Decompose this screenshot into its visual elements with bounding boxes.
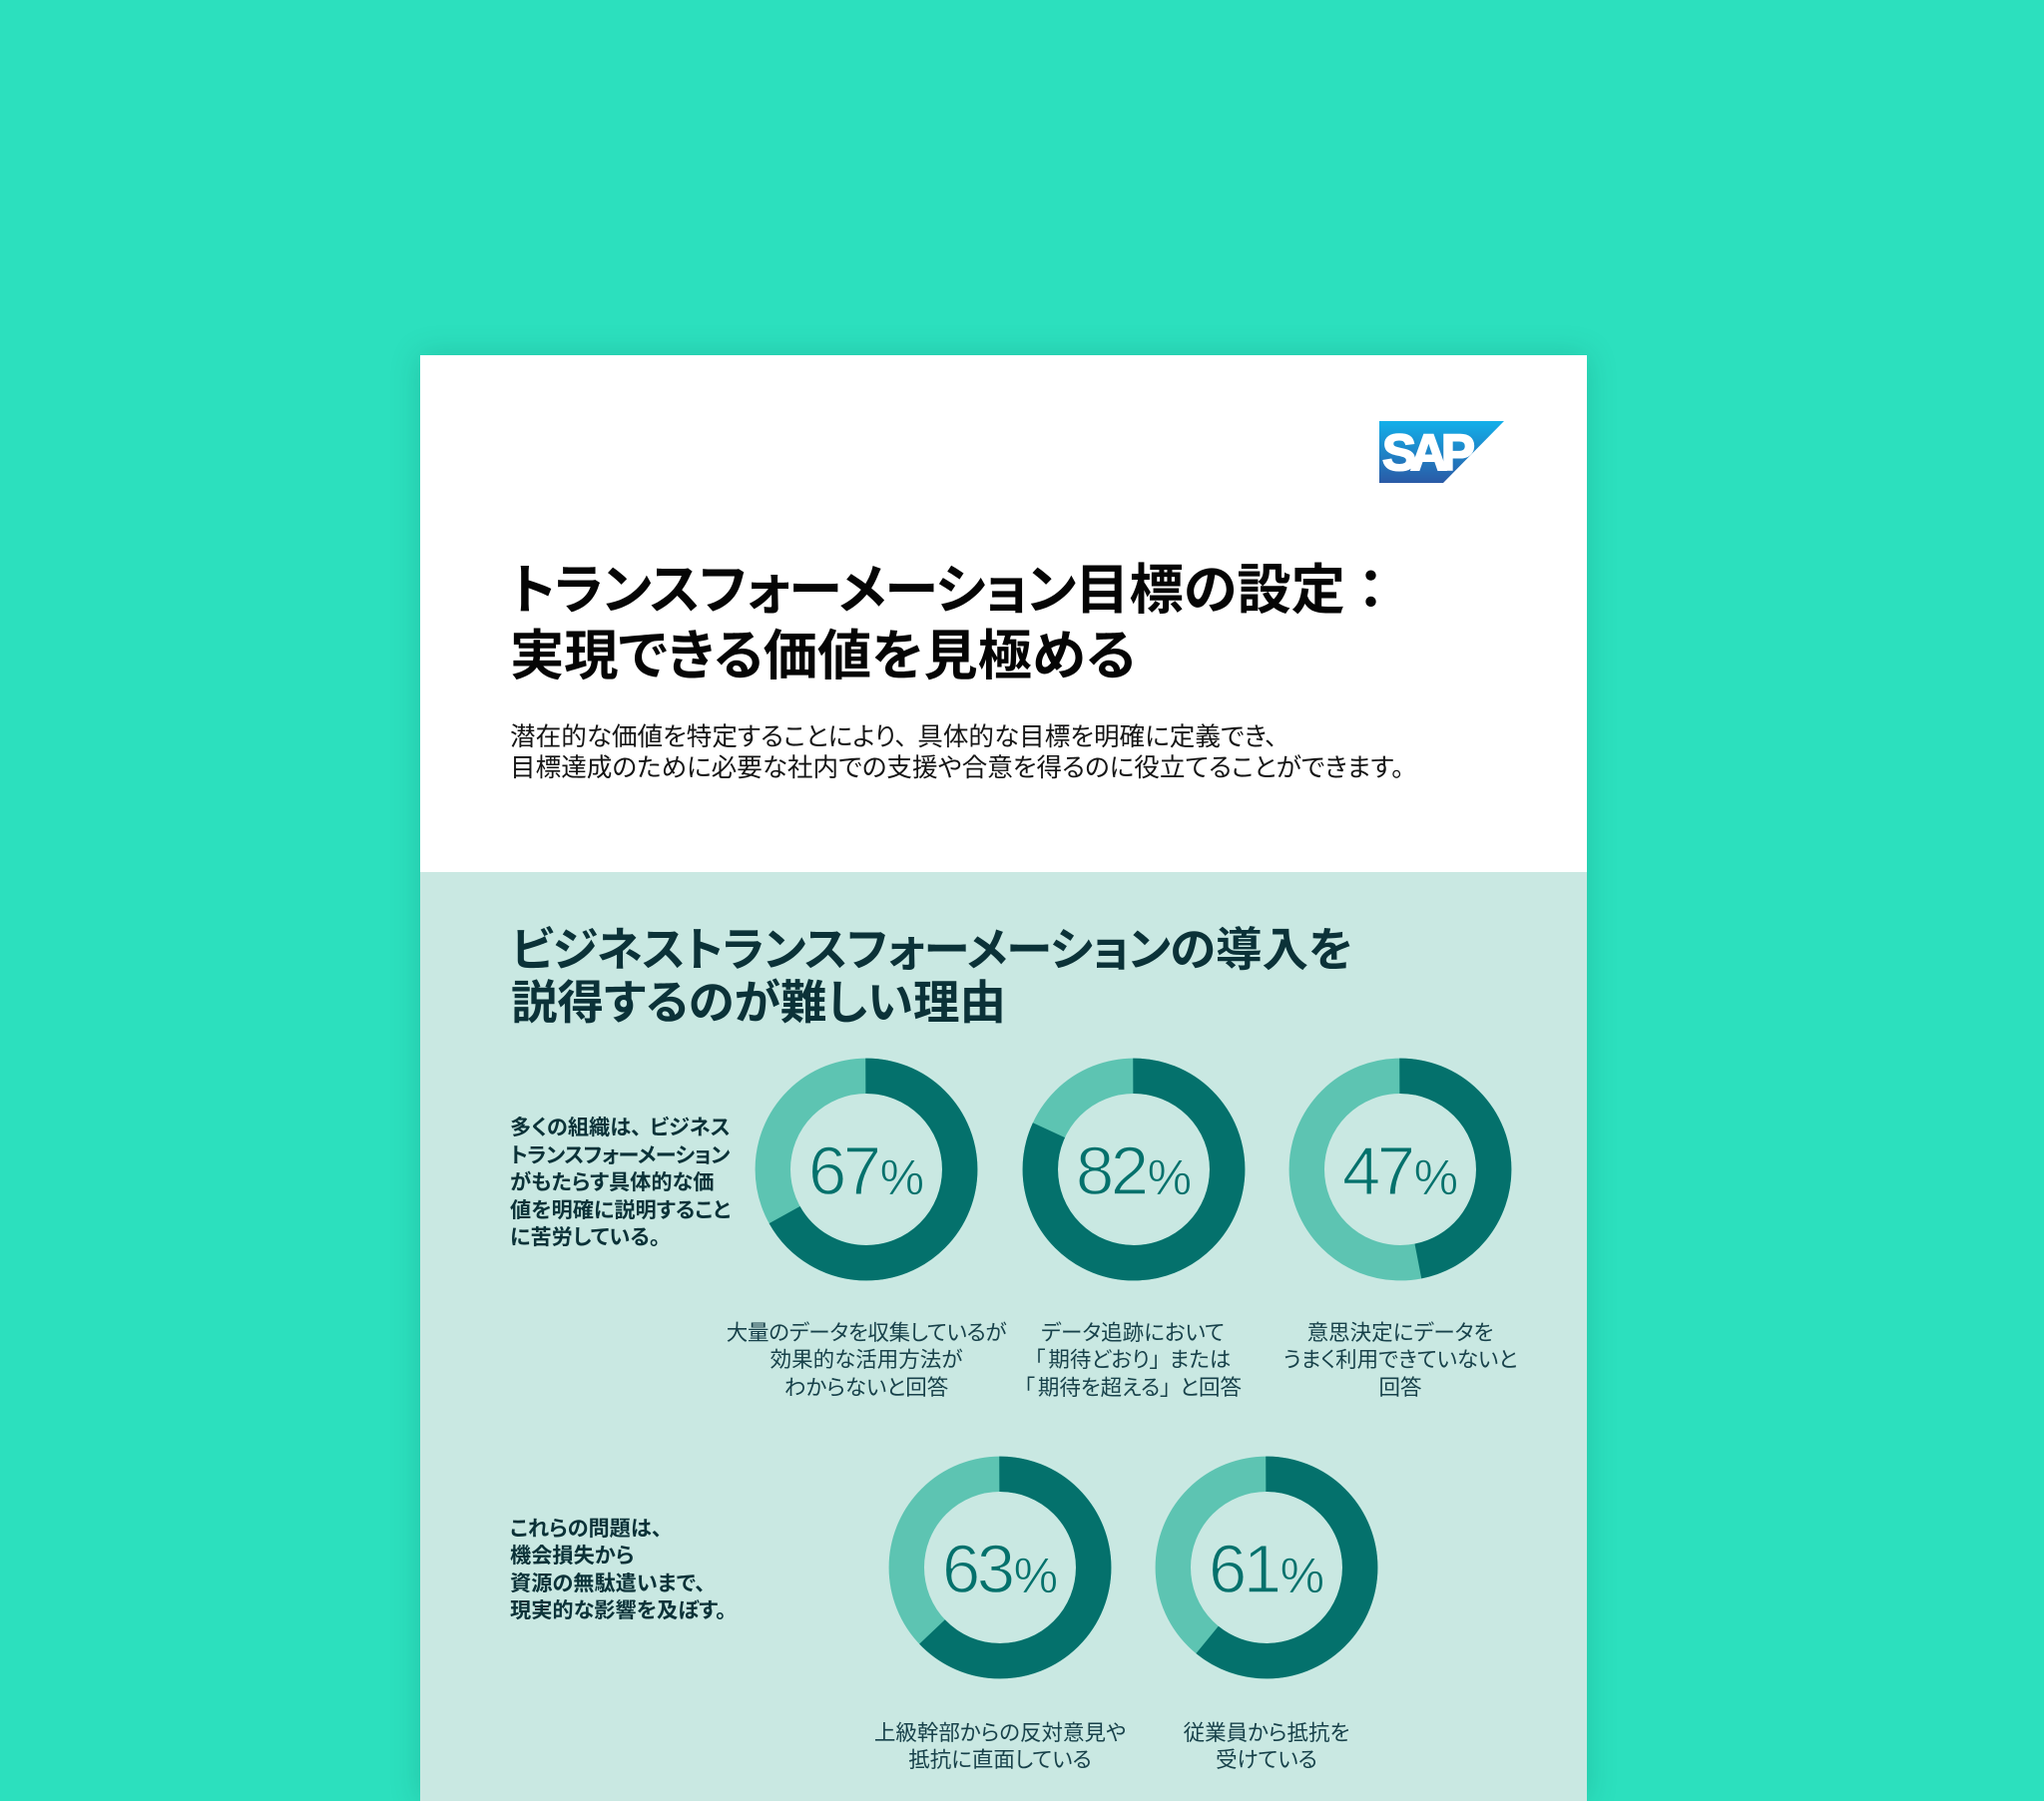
- caption: 47%: 意思決定にデータを: [1307, 1321, 1493, 1345]
- caption: 61%: 従業員から抵抗を: [1184, 1720, 1349, 1744]
- lead text: row 2: 現実的な影響を及ぼす。: [510, 1599, 727, 1622]
- intro text: 潜在的な価値を特定することにより、 具体的な目標を明確に定義でき、: [510, 722, 1278, 750]
- lead text: row 2: [510, 1517, 727, 1622]
- donut chart: 63%: 63%: [942, 1531, 1058, 1607]
- donut chart: 82%: [1022, 1058, 1246, 1281]
- lead text: row 1: がもたらす具体的な価: [510, 1171, 714, 1194]
- donut chart: 82%: 82%: [1075, 1132, 1192, 1209]
- lead text: row 2: 機会損失から: [510, 1545, 634, 1568]
- lead text: row 1: [510, 1116, 731, 1249]
- title: トランスフォーメーション目標の設定：: [510, 560, 1384, 621]
- lead text: row 1: 多くの組織は、 ビジネス: [510, 1117, 731, 1139]
- lead text: row 1: トランスフォーメーション: [510, 1144, 730, 1167]
- caption: 47%: 回答: [1378, 1375, 1422, 1399]
- icon: SAP logo: SAP: [1382, 424, 1474, 481]
- caption: 67%: わからないと回答: [784, 1375, 948, 1399]
- section heading: 説得するのが難しい理由: [511, 977, 1006, 1029]
- caption: 67%: 効果的な活用方法が: [770, 1348, 962, 1372]
- caption: 82%: [1024, 1321, 1242, 1399]
- caption: 82%: 「期待を超える」 と回答: [1024, 1375, 1242, 1399]
- donut chart: 61%: [1156, 1457, 1377, 1678]
- caption: 63%: 上級幹部からの反対意見や: [874, 1720, 1126, 1744]
- donut chart: 47%: [1289, 1058, 1511, 1281]
- lead text: row 1: に苦労している。: [510, 1226, 660, 1249]
- lead text: row 2: これらの問題は、: [510, 1517, 662, 1541]
- caption: 63%: [874, 1720, 1126, 1772]
- caption: 67%: [727, 1321, 1006, 1399]
- caption: 67%: 大量のデータを収集しているが: [727, 1321, 1006, 1345]
- donut chart: 63%: [888, 1457, 1112, 1678]
- donut chart: 67%: 67%: [808, 1132, 924, 1209]
- caption: 47%: [1283, 1321, 1517, 1399]
- caption: 61%: 受けている: [1216, 1748, 1317, 1772]
- panel: teal section: [420, 872, 1587, 1801]
- intro text: 目標達成のために必要な社内での支援や合意を得るのに役立てることができます。: [510, 754, 1404, 782]
- caption: 47%: うまく利用できていないと: [1283, 1348, 1517, 1372]
- donut chart: 47%: 47%: [1342, 1132, 1458, 1209]
- caption: 82%: 「期待どおり」 または: [1035, 1348, 1231, 1372]
- lead text: row 2: 資源の無駄遣いまで、: [510, 1573, 706, 1594]
- section heading: ビジネストランスフォーメーションの導入を: [511, 924, 1353, 976]
- section heading: [511, 924, 1353, 1029]
- lead text: row 1: 値を明確に説明すること: [510, 1199, 731, 1222]
- caption: 82%: データ追跡において: [1041, 1321, 1225, 1345]
- icon: SAP logo: [1379, 421, 1504, 483]
- intro text: [510, 722, 1404, 782]
- caption: 61%: [1184, 1720, 1349, 1772]
- white card: [420, 355, 1587, 1801]
- title: [510, 560, 1384, 686]
- caption: 63%: 抵抗に直面している: [908, 1748, 1092, 1772]
- donut chart: 61%: 61%: [1209, 1531, 1324, 1607]
- donut chart: 67%: [755, 1058, 978, 1281]
- title: 実現できる価値を見極める: [510, 626, 1136, 686]
